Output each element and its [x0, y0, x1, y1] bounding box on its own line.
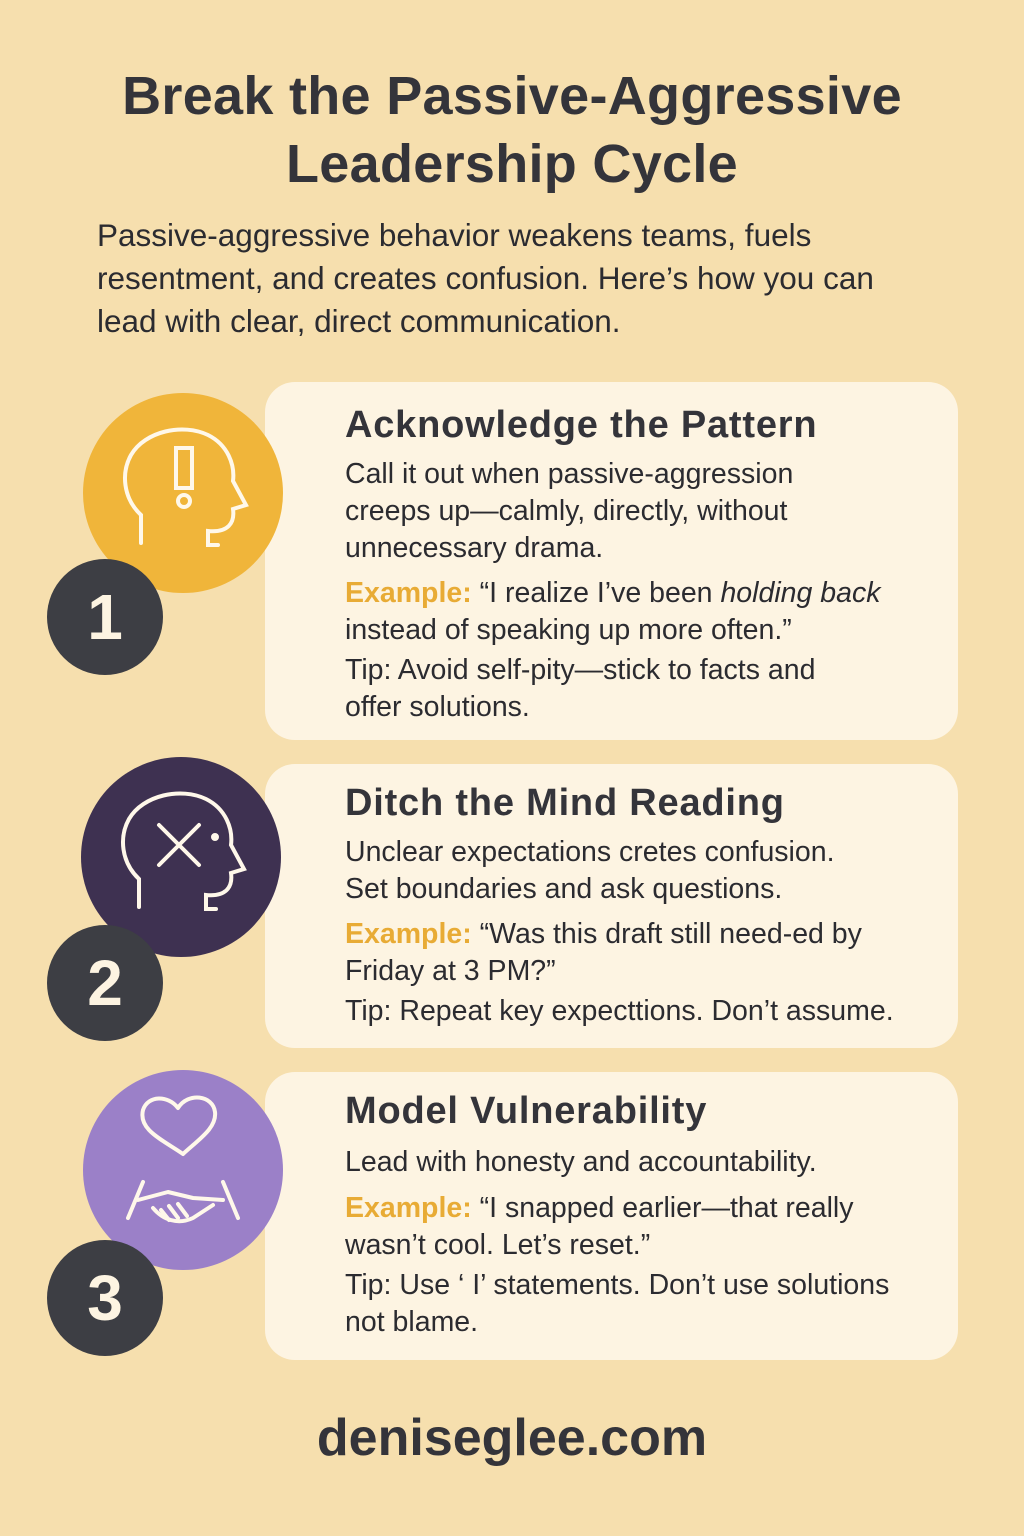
heading 2: Ditch the Mind Reading — [345, 782, 785, 824]
body 3: Lead with honesty and accountability. Example: “I snapped earlier—that really — [345, 1146, 854, 1224]
body 3: not blame. — [345, 1306, 478, 1338]
intro text: resentment, and creates confusion. Here’s how you can — [97, 260, 874, 296]
number 2 — [47, 925, 163, 1041]
number 2: 2 — [87, 947, 123, 1019]
intro text: lead with clear, direct communication. — [97, 303, 620, 339]
card 2 — [265, 764, 958, 1048]
intro text — [97, 217, 874, 339]
body 1: offer solutions. — [345, 691, 530, 723]
body 2: Friday at 3 PM?” Tip: Repeat key expecttions. Don’t assume. — [345, 955, 894, 1027]
number 1: 1 — [87, 581, 123, 653]
body 2: Unclear expectations cretes confusion. — [345, 836, 835, 868]
body 1: creeps up—calmly, directly, without — [345, 495, 787, 527]
body 2 — [345, 836, 894, 1027]
number 3 — [47, 1240, 163, 1356]
title: Break the Passive-Aggressive — [122, 66, 902, 126]
number 1 — [47, 559, 163, 675]
card 1 — [265, 382, 958, 740]
icon 1: head with exclamation — [83, 393, 283, 593]
body 2: Set boundaries and ask questions. Example: “Was this draft still need-ed by — [345, 873, 862, 950]
title — [122, 66, 902, 194]
body 1: instead of speaking up more often.” Tip: Avoid self-pity—stick to facts and — [345, 614, 815, 686]
body 1: unnecessary drama. Example: “I realize I’ve been holding back — [345, 532, 880, 609]
footer url: deniseglee.com — [317, 1409, 707, 1467]
heading 1: Acknowledge the Pattern — [345, 404, 817, 446]
number 3: 3 — [87, 1262, 123, 1334]
title: Leadership Cycle — [286, 134, 738, 194]
icon 3: heart and handshake — [83, 1070, 283, 1270]
icon 2: head with X — [81, 757, 281, 957]
card 3 — [265, 1072, 958, 1360]
heading 3: Model Vulnerability — [345, 1090, 707, 1132]
body 1 — [345, 458, 882, 723]
body 3: wasn’t cool. Let’s reset.” Tip: Use ‘ I’ statements. Don’t use solutions — [345, 1229, 889, 1301]
body 1: Call it out when passive-aggression — [345, 458, 793, 490]
intro text: Passive-aggressive behavior weakens teams, fuels — [97, 217, 811, 253]
body 3 — [345, 1146, 889, 1338]
